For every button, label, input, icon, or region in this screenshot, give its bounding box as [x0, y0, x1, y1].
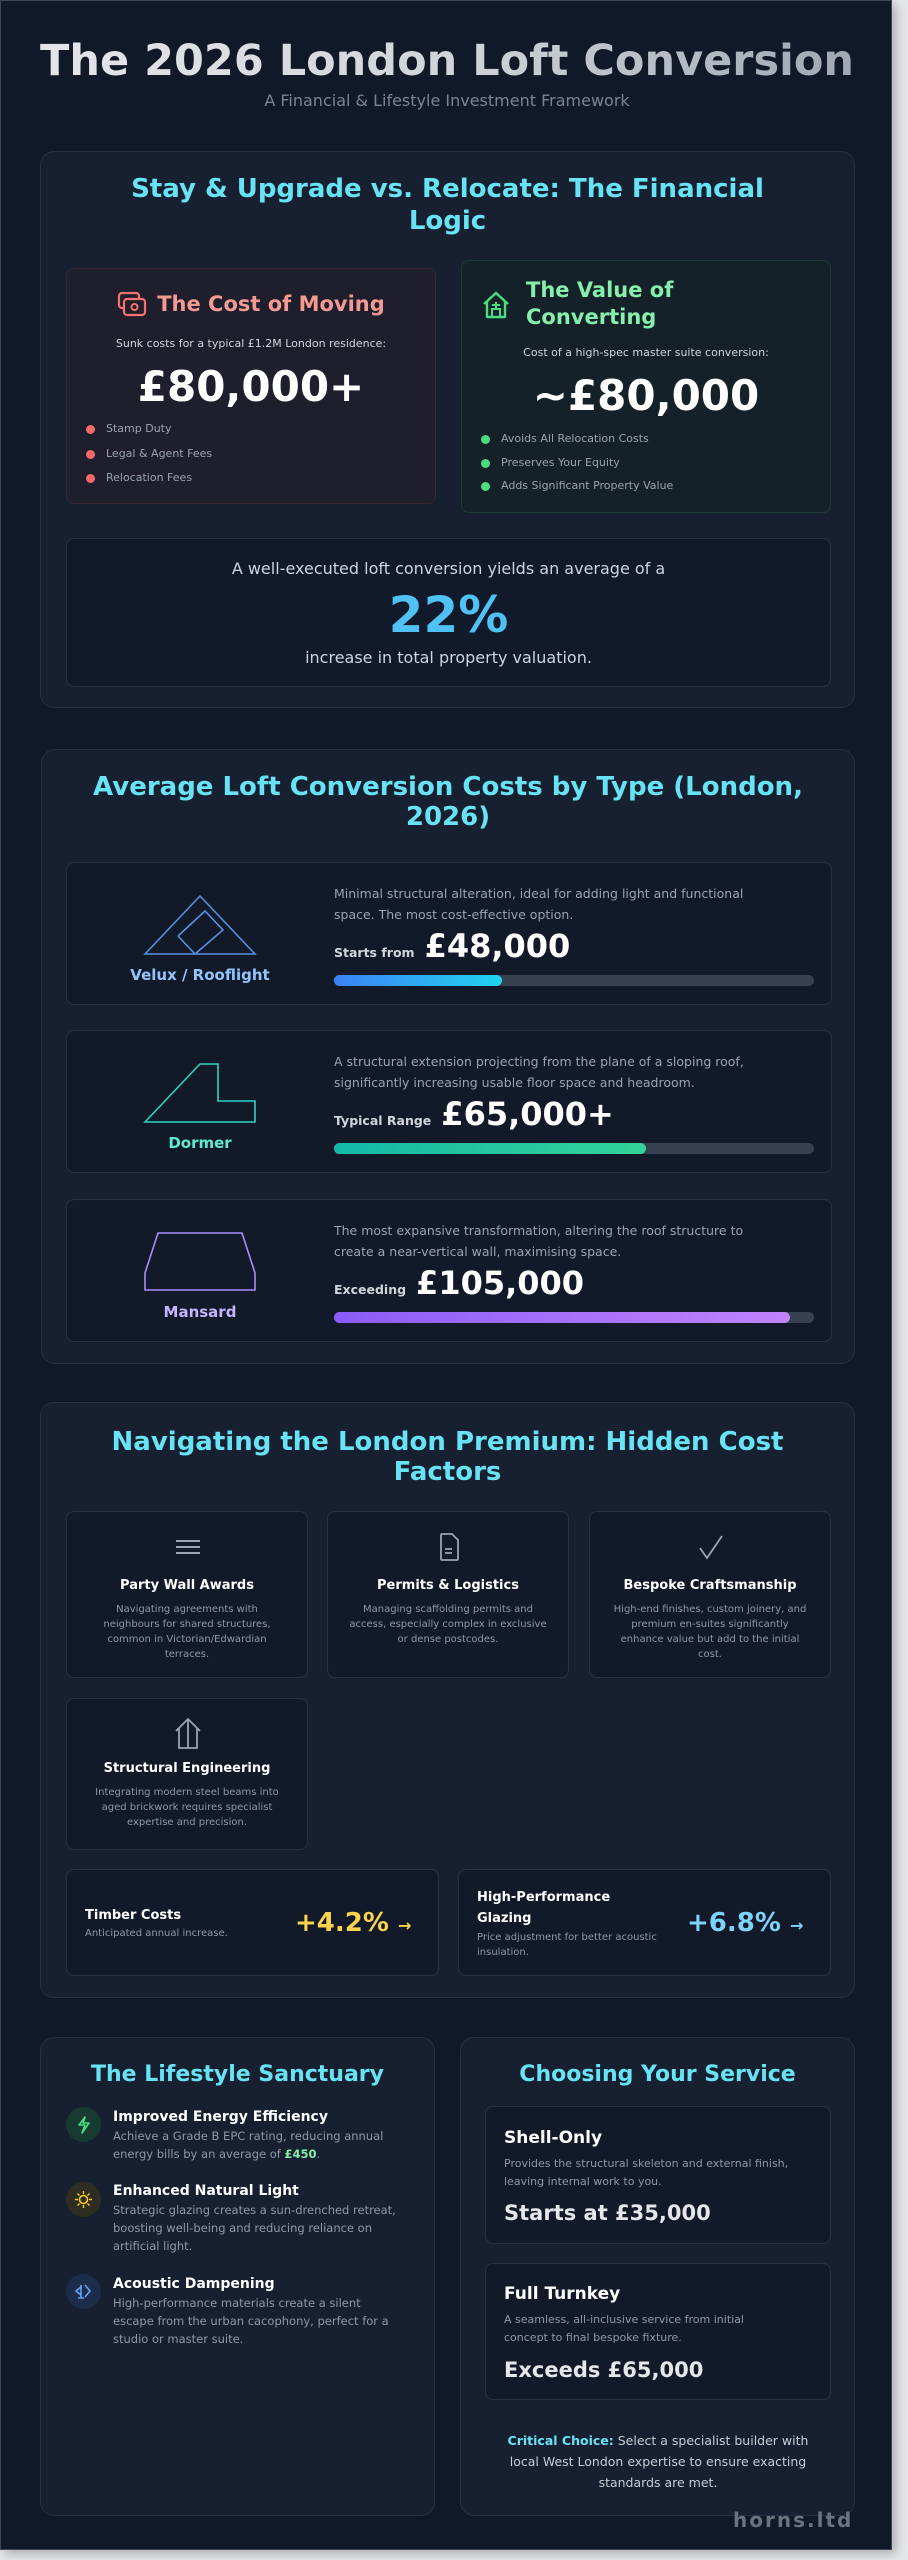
card: mansard: Mansard — [164, 1303, 236, 1321]
card: craftsmanship — [589, 1511, 831, 1678]
icon: lines — [176, 1540, 200, 1554]
heading: choosing service: Choosing Your Service — [519, 2062, 796, 2087]
stat: glazing: Glazing — [477, 1911, 531, 1926]
stat: 80000: ~£80,000 — [533, 371, 759, 420]
icon: dormer — [143, 1063, 256, 1123]
stat: timber: Anticipated annual increase. — [85, 1928, 228, 1939]
heading: financial logic: Stay & Upgrade vs. Relocate: The Financial — [131, 174, 764, 204]
heading: value of converting: The Value of — [526, 278, 673, 302]
heading: costs by type — [93, 772, 803, 832]
heading: lifestyle: The Lifestyle Sanctuary — [91, 2062, 384, 2087]
heading: costs by type: 2026) — [406, 802, 490, 832]
card: dormer: significantly increasing usable floor space and headroom. — [334, 1075, 695, 1090]
stat: glazing: Price adjustment for better acoustic insulation. — [477, 1932, 657, 1958]
card: shell-only: Shell-Only — [504, 2128, 602, 2148]
card: permits: Managing scaffolding permits and access, especially complex in exclusive or dense postcodes. — [349, 1604, 547, 1645]
card: mansard: Exceeding £105,000 — [334, 1264, 584, 1302]
callout: 22%: increase in total property valuation. — [305, 648, 592, 667]
card: velux: Minimal structural alteration, ideal for adding light and functional — [334, 886, 743, 901]
box: cost of moving — [66, 268, 436, 504]
icon: structure — [175, 1718, 201, 1749]
panel: lifestyle — [40, 2037, 435, 2516]
stat: glazing: High-Performance — [477, 1890, 610, 1905]
card: velux: Velux / Rooflight — [130, 966, 270, 984]
card: full turnkey: Exceeds £65,000 — [504, 2358, 703, 2382]
stat: timber: +4.2% → — [295, 1908, 411, 1938]
card: dormer: Typical Range £65,000+ — [334, 1095, 614, 1133]
card: mansard: The most expansive transformation, altering the roof structure to — [334, 1223, 743, 1238]
card: party wall: Party Wall Awards — [120, 1578, 254, 1593]
heading: financial logic: Logic — [409, 206, 486, 236]
card: shell-only: leaving internal work to you. — [504, 2175, 662, 2188]
card: craftsmanship: Bespoke Craftsmanship — [624, 1578, 796, 1593]
card: velux: space. The most cost-effective option. — [334, 907, 573, 922]
stat: 22%: 22% — [389, 586, 508, 644]
item: acoustic: Acoustic Dampening — [113, 2276, 275, 2292]
card: structural — [66, 1698, 308, 1850]
card: shell-only — [485, 2106, 831, 2244]
icon: check — [699, 1536, 723, 1560]
card: permits: Permits & Logistics — [377, 1578, 519, 1593]
item: energy — [66, 2107, 383, 2161]
item: light — [66, 2182, 396, 2253]
text: critical choice: local West London expertise to ensure exacting — [510, 2454, 806, 2469]
card: structural: Structural Engineering — [104, 1761, 270, 1776]
callout: 22%: A well-executed loft conversion yields an average of a — [232, 559, 665, 578]
card: full turnkey: concept to final bespoke fixture. — [504, 2331, 682, 2344]
stat: glazing — [458, 1869, 831, 1976]
heading: value of converting: Converting — [526, 305, 656, 329]
panel: choosing service — [460, 2037, 855, 2516]
heading: hidden costs: Factors — [394, 1457, 501, 1487]
card: shell-only: Starts at £35,000 — [504, 2201, 711, 2225]
heading: hidden costs: Navigating the London Premium: Hidden Cost — [112, 1427, 783, 1457]
card: full turnkey — [485, 2263, 831, 2400]
watermark: horns.ltd — [733, 2508, 853, 2532]
heading: cost of moving: The Cost of Moving — [157, 292, 385, 316]
list: moving costs: Legal & Agent Fees — [106, 447, 212, 460]
card: dormer — [66, 1030, 832, 1173]
list: benefits — [481, 432, 673, 492]
text: critical choice — [508, 2433, 808, 2490]
card: full turnkey: Full Turnkey — [504, 2284, 620, 2304]
card: mansard — [66, 1199, 832, 1342]
heading: value of converting — [526, 278, 674, 329]
panel: hidden cost factors — [40, 1402, 855, 1998]
heading: financial logic — [131, 174, 764, 236]
panel: financial logic — [40, 151, 855, 708]
icon: house — [483, 292, 509, 318]
card: dormer: A structural extension projecting from the plane of a sloping roof, — [334, 1054, 744, 1069]
card: full turnkey: A seamless, all-inclusive service from initial — [504, 2313, 744, 2326]
icon: mansard — [144, 1232, 256, 1291]
stat: glazing: +6.8% → — [687, 1908, 803, 1938]
stat: 80000+: £80,000+ — [138, 362, 364, 411]
item: acoustic — [66, 2274, 389, 2346]
icon: document — [440, 1533, 459, 1561]
callout: 22% — [66, 538, 831, 687]
card: structural: Integrating modern steel beams into aged brickwork requires specialist expertise and precision. — [95, 1787, 279, 1828]
list: moving costs: Relocation Fees — [106, 471, 192, 484]
panel: costs by type — [41, 749, 855, 1364]
item: acoustic: High-performance materials create a silent escape from the urban cacophony, perfect for a studio or master suite. — [113, 2296, 389, 2346]
heading: hidden costs — [112, 1427, 783, 1487]
card: velux — [66, 862, 832, 1005]
text: critical choice: Critical Choice: Select a specialist builder with — [508, 2433, 808, 2448]
list: benefits: Preserves Your Equity — [501, 456, 620, 469]
list: benefits: Adds Significant Property Value — [501, 479, 673, 492]
card: permits — [327, 1511, 569, 1678]
item: energy: Achieve a Grade B EPC rating, reducing annual energy bills by an average of £450. — [113, 2129, 383, 2161]
subtitle: A Financial & Lifestyle Investment Framework — [264, 91, 630, 110]
stat: timber: Timber Costs — [85, 1908, 181, 1923]
title: The 2026 London Loft Conversion — [40, 36, 854, 86]
item: light: Strategic glazing creates a sun-drenched retreat, boosting well-being and reducing reliance on artificial light. — [113, 2203, 396, 2253]
list: benefits: Avoids All Relocation Costs — [501, 432, 649, 445]
list: moving costs — [86, 422, 212, 484]
heading: costs by type: Average Loft Conversion Costs by Type (London, — [93, 772, 803, 802]
card: shell-only: Provides the structural skeleton and external finish, — [504, 2157, 788, 2170]
card: craftsmanship: High-end finishes, custom joinery, and premium en-suites significantly enhance value but add to the initial cost. — [614, 1604, 806, 1660]
list: moving costs: Stamp Duty — [106, 422, 172, 435]
box: value of converting — [461, 260, 831, 513]
card: party wall: Navigating agreements with neighbours for shared structures, common in Victorian/Edwardian terraces. — [103, 1604, 271, 1660]
card: party wall — [66, 1511, 308, 1678]
icon: money — [118, 292, 146, 316]
item: light: Enhanced Natural Light — [113, 2183, 299, 2199]
text: cost of suite: Cost of a high-spec master suite conversion: — [523, 346, 769, 359]
icon: velux — [143, 895, 257, 955]
text: sunk costs: Sunk costs for a typical £1.2M London residence: — [116, 337, 386, 350]
card: dormer: Dormer — [168, 1134, 232, 1152]
card: mansard: create a near-vertical wall, maximising space. — [334, 1244, 621, 1259]
text: critical choice: standards are met. — [599, 2475, 717, 2490]
stat: timber — [66, 1869, 439, 1976]
item: energy: Improved Energy Efficiency — [113, 2109, 328, 2125]
card: velux: Starts from £48,000 — [334, 927, 570, 965]
